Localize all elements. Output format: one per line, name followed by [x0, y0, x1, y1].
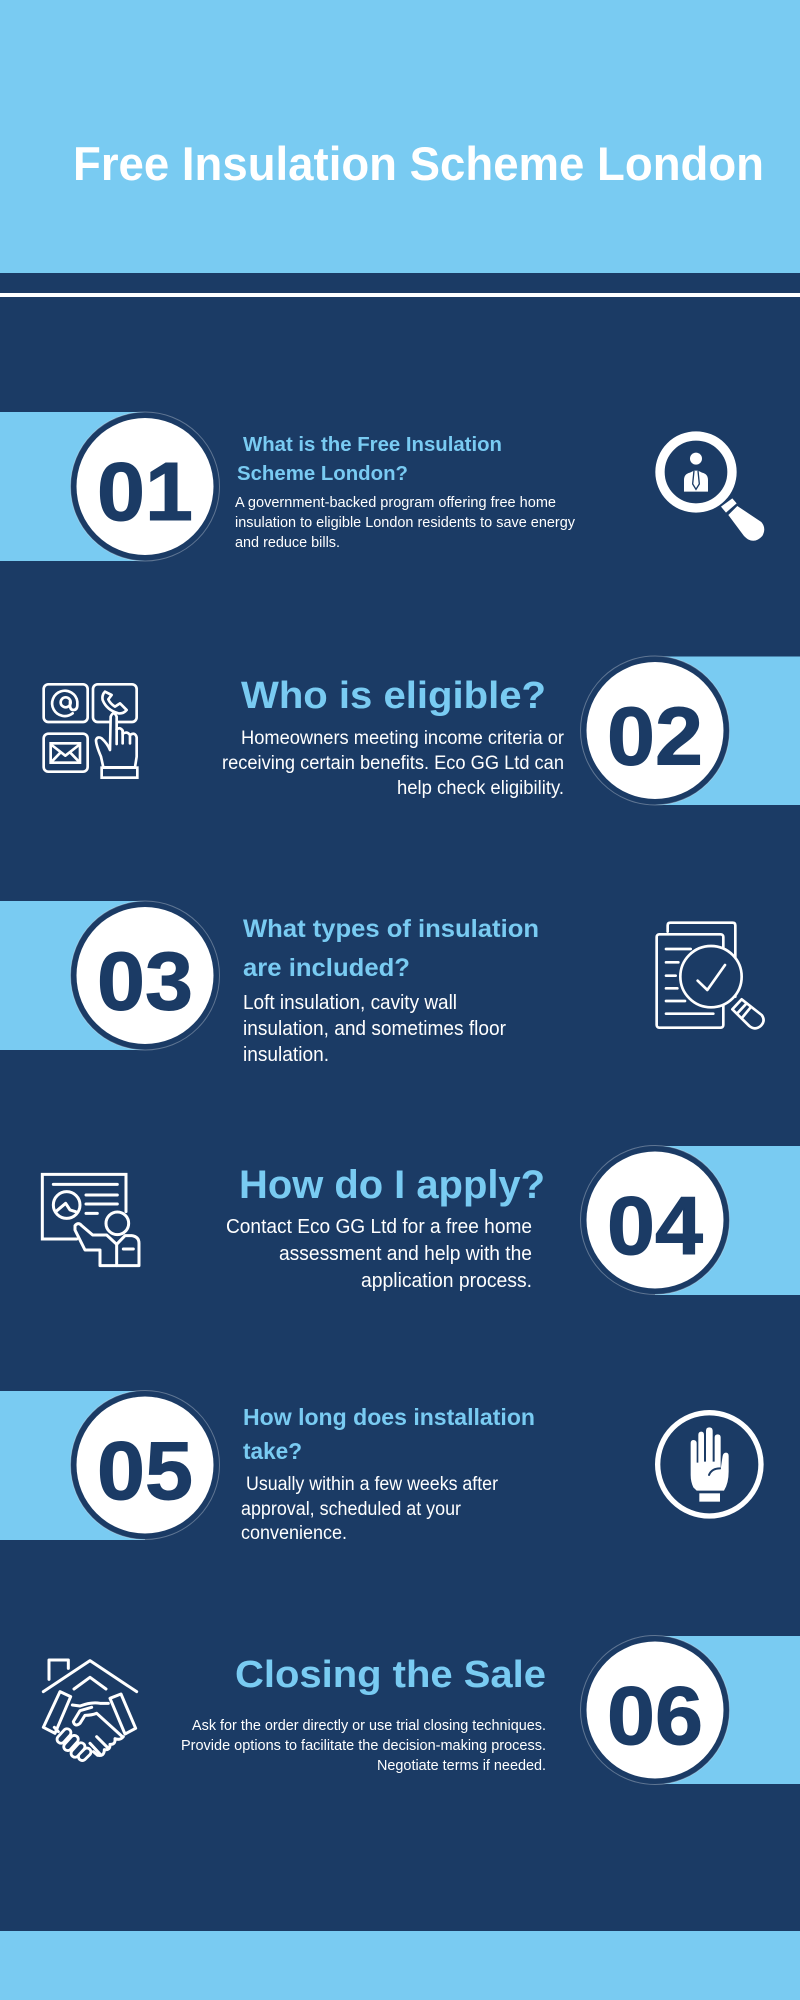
body text 05: approval, scheduled at your [241, 1499, 462, 1520]
body text 03 [243, 992, 506, 1066]
footer band [0, 1931, 800, 2000]
body text 03: insulation, and sometimes floor [243, 1018, 506, 1040]
icon: documents with check magnifier [657, 923, 764, 1028]
number badge 06 [580, 1636, 730, 1784]
body text 04: assessment and help with the [279, 1243, 532, 1265]
number band 03 [0, 901, 145, 1050]
number badge 02 [580, 656, 730, 805]
heading 06: Closing the Sale [235, 1654, 546, 1696]
number badge 06: 06 [607, 1669, 703, 1762]
body text 05: Usually within a few weeks after [246, 1474, 499, 1495]
icon: contact keypad with hand [44, 684, 137, 778]
icon: magnifier with person [660, 436, 764, 541]
body text 06: Provide options to facilitate the decision-making process. [181, 1737, 546, 1754]
number badge 01: 01 [97, 445, 193, 538]
heading 04: How do I apply? [239, 1163, 545, 1207]
heading 02: Who is eligible? [241, 675, 546, 717]
heading 01: What is the Free Insulation [243, 434, 502, 456]
icon: raised hand in circle [658, 1413, 761, 1516]
heading 05: take? [243, 1438, 302, 1464]
number badge 04 [580, 1146, 730, 1294]
heading 01 [237, 434, 502, 485]
heading 05 [243, 1404, 535, 1464]
number band 05 [0, 1391, 145, 1540]
number band 02 [655, 656, 800, 805]
panel: 04 how do I apply [42, 1146, 800, 1295]
number badge 05 [70, 1390, 220, 1540]
body text 05 [241, 1474, 499, 1544]
number band 06 [655, 1636, 800, 1784]
body text 04 [226, 1216, 532, 1292]
panel: 06 closing the sale [43, 1636, 800, 1784]
body text 02: Homeowners meeting income criteria or [241, 728, 565, 749]
title: Free Insulation Scheme London [73, 137, 764, 190]
number badge 01 [70, 412, 220, 561]
body text 06 [181, 1717, 546, 1774]
icon: house and handshake [43, 1660, 137, 1757]
body text 02: help check eligibility. [397, 778, 564, 799]
panel: 05 how long does installation take [0, 1390, 761, 1544]
body text 06: Negotiate terms if needed. [377, 1757, 546, 1774]
body text 01: and reduce bills. [235, 534, 340, 551]
header band [0, 0, 800, 273]
body text 05: convenience. [241, 1523, 347, 1544]
number badge 05: 05 [97, 1424, 193, 1517]
heading 03: are included? [243, 954, 410, 982]
heading 01: Scheme London? [237, 463, 408, 485]
number badge 03 [70, 901, 220, 1050]
number badge 04: 04 [607, 1179, 703, 1272]
number band 04 [655, 1146, 800, 1295]
panel: 01 what is the scheme [0, 412, 764, 561]
body text 04: application process. [361, 1270, 532, 1292]
number badge 02: 02 [607, 690, 703, 782]
heading 05: How long does installation [243, 1404, 535, 1430]
body text 03: Loft insulation, cavity wall [243, 992, 457, 1014]
body text 01 [235, 494, 575, 551]
body text 01: A government-backed program offering free home [235, 494, 556, 511]
body text 06: Ask for the order directly or use trial closing techniques. [192, 1717, 546, 1734]
body text 03: insulation. [243, 1044, 329, 1066]
panel: 03 types of insulation [0, 901, 764, 1066]
heading 03 [243, 915, 539, 982]
panel: 02 who is eligible [44, 656, 800, 805]
body text 02: receiving certain benefits. Eco GG Ltd can [222, 753, 564, 774]
number band 01 [0, 412, 145, 561]
body text 01: insulation to eligible London residents to save energy [235, 514, 575, 531]
number badge 03: 03 [97, 934, 193, 1028]
heading 03: What types of insulation [243, 915, 539, 943]
body text 02 [222, 728, 565, 799]
icon: presenter at board [42, 1174, 139, 1266]
body text 04: Contact Eco GG Ltd for a free home [226, 1216, 532, 1238]
